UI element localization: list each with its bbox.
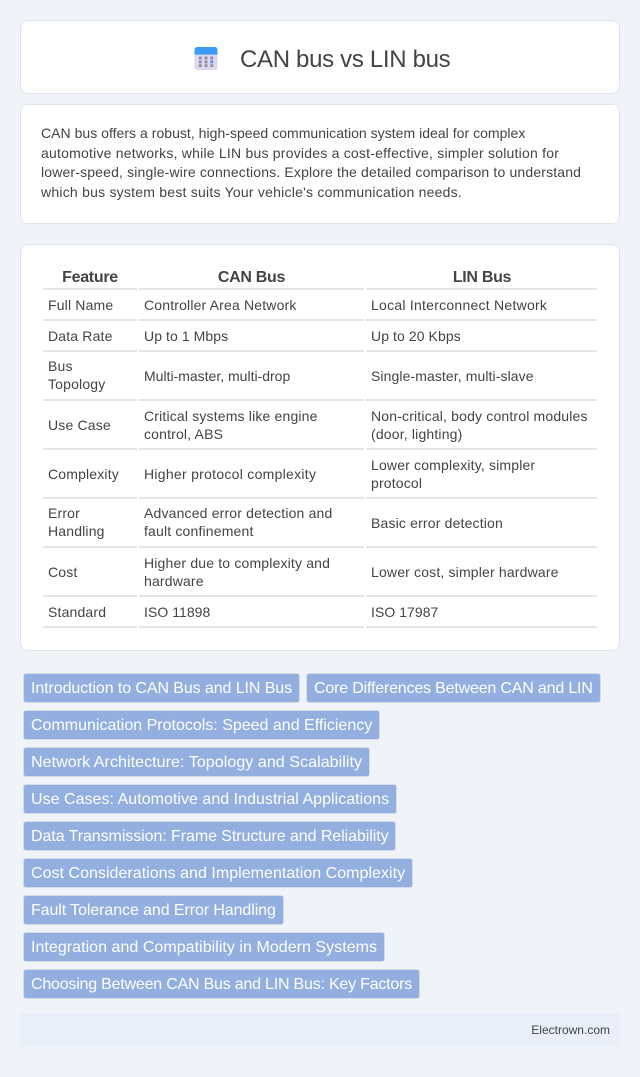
row: full name: Local Interconnect Network — [371, 297, 547, 313]
intro text: CAN bus offers a robust, high-speed communication system ideal for complex — [41, 125, 525, 141]
row: cost: Lower cost, simpler hardware — [371, 564, 559, 580]
tag: use cases: Use Cases: Automotive and Industrial Applications — [31, 791, 389, 808]
row: complexity: Lower complexity, simpler — [371, 457, 535, 473]
row: use case: (door, lighting) — [371, 426, 462, 442]
row: standard: Standard — [48, 604, 106, 620]
tag: choosing — [23, 969, 420, 999]
row: use case: Critical systems like engine — [144, 408, 318, 424]
row: use case: Non-critical, body control modules — [371, 408, 588, 424]
row: error handling: Error — [48, 505, 80, 521]
row: standard: ISO 11898 — [144, 604, 210, 620]
tag: core differences: Core Differences Between CAN and LIN — [314, 680, 593, 697]
row: use case: control, ABS — [144, 426, 223, 442]
icon: calendar — [194, 47, 218, 70]
row: use case — [48, 408, 588, 442]
row: bus topology: Multi-master, multi-drop — [144, 368, 290, 384]
row: full name: Controller Area Network — [144, 297, 297, 313]
footer credit: Electrown.com — [531, 1023, 610, 1037]
row: standard: ISO 17987 — [371, 604, 438, 620]
row: data rate: Up to 1 Mbps — [144, 328, 228, 344]
row: complexity: protocol — [371, 475, 422, 491]
tag: data transmission: Data Transmission: Frame Structure and Reliability — [31, 828, 389, 845]
row: standard — [48, 604, 438, 620]
intro text: lower-speed, single-wire connections. Explore the detailed comparison to understand — [41, 164, 581, 180]
row: full name: Full Name — [48, 297, 113, 313]
row: error handling: fault confinement — [144, 523, 254, 539]
footer — [20, 1013, 620, 1047]
tag: data transmission — [23, 821, 396, 851]
intro text: automotive networks, while LIN bus provides a cost-effective, simpler solution for — [41, 144, 559, 160]
header panel — [20, 20, 620, 94]
tag: core differences — [306, 673, 601, 703]
table header: Feature — [62, 269, 118, 286]
row: data rate — [48, 328, 461, 344]
row: bus topology: Single-master, multi-slave — [371, 368, 534, 384]
row: data rate: Data Rate — [48, 328, 113, 344]
row: error handling: Advanced error detection and — [144, 505, 332, 521]
row: complexity — [48, 457, 535, 491]
row: bus topology: Bus — [48, 358, 73, 374]
tag: integration: Integration and Compatibility in Modern Systems — [31, 939, 377, 956]
tag: introduction — [23, 673, 300, 703]
tag: cost considerations — [23, 858, 413, 888]
row: error handling: Basic error detection — [371, 515, 503, 531]
tag: network architecture — [23, 747, 370, 777]
row: complexity: Higher protocol complexity — [144, 466, 316, 482]
table header: LIN Bus — [453, 269, 511, 286]
row: complexity: Complexity — [48, 466, 119, 482]
row: data rate: Up to 20 Kbps — [371, 328, 461, 344]
row: error handling: Handling — [48, 523, 105, 539]
tag: choosing: Choosing Between CAN Bus and LIN Bus: Key Factors — [31, 976, 412, 993]
topic tags — [23, 673, 601, 999]
row: use case: Use Case — [48, 417, 111, 433]
comparison table panel — [20, 244, 620, 651]
tag: introduction: Introduction to CAN Bus and LIN Bus — [31, 680, 292, 697]
tag: communication protocols: Communication Protocols: Speed and Efficiency — [31, 717, 372, 734]
row: bus topology — [48, 358, 534, 392]
intro text: which bus system best suits Your vehicle's communication needs. — [41, 184, 462, 200]
tag: communication protocols — [23, 710, 380, 740]
tag: fault tolerance: Fault Tolerance and Error Handling — [31, 902, 276, 919]
tag: fault tolerance — [23, 895, 284, 925]
table header: CAN Bus — [218, 269, 285, 286]
tag: network architecture: Network Architecture: Topology and Scalability — [31, 754, 362, 771]
row: cost: Higher due to complexity and — [144, 555, 330, 571]
row: cost: Cost — [48, 564, 77, 580]
row: cost — [48, 555, 559, 589]
title: CAN bus vs LIN bus — [240, 46, 450, 73]
intro text — [41, 125, 581, 200]
table header — [62, 269, 511, 286]
row: cost: hardware — [144, 573, 204, 589]
tag: use cases — [23, 784, 397, 814]
row: full name — [48, 297, 547, 313]
intro panel — [20, 104, 620, 224]
tag: cost considerations: Cost Considerations and Implementation Complexity — [31, 865, 405, 882]
tag: integration — [23, 932, 385, 962]
row: error handling — [48, 505, 503, 539]
row: bus topology: Topology — [48, 376, 105, 392]
